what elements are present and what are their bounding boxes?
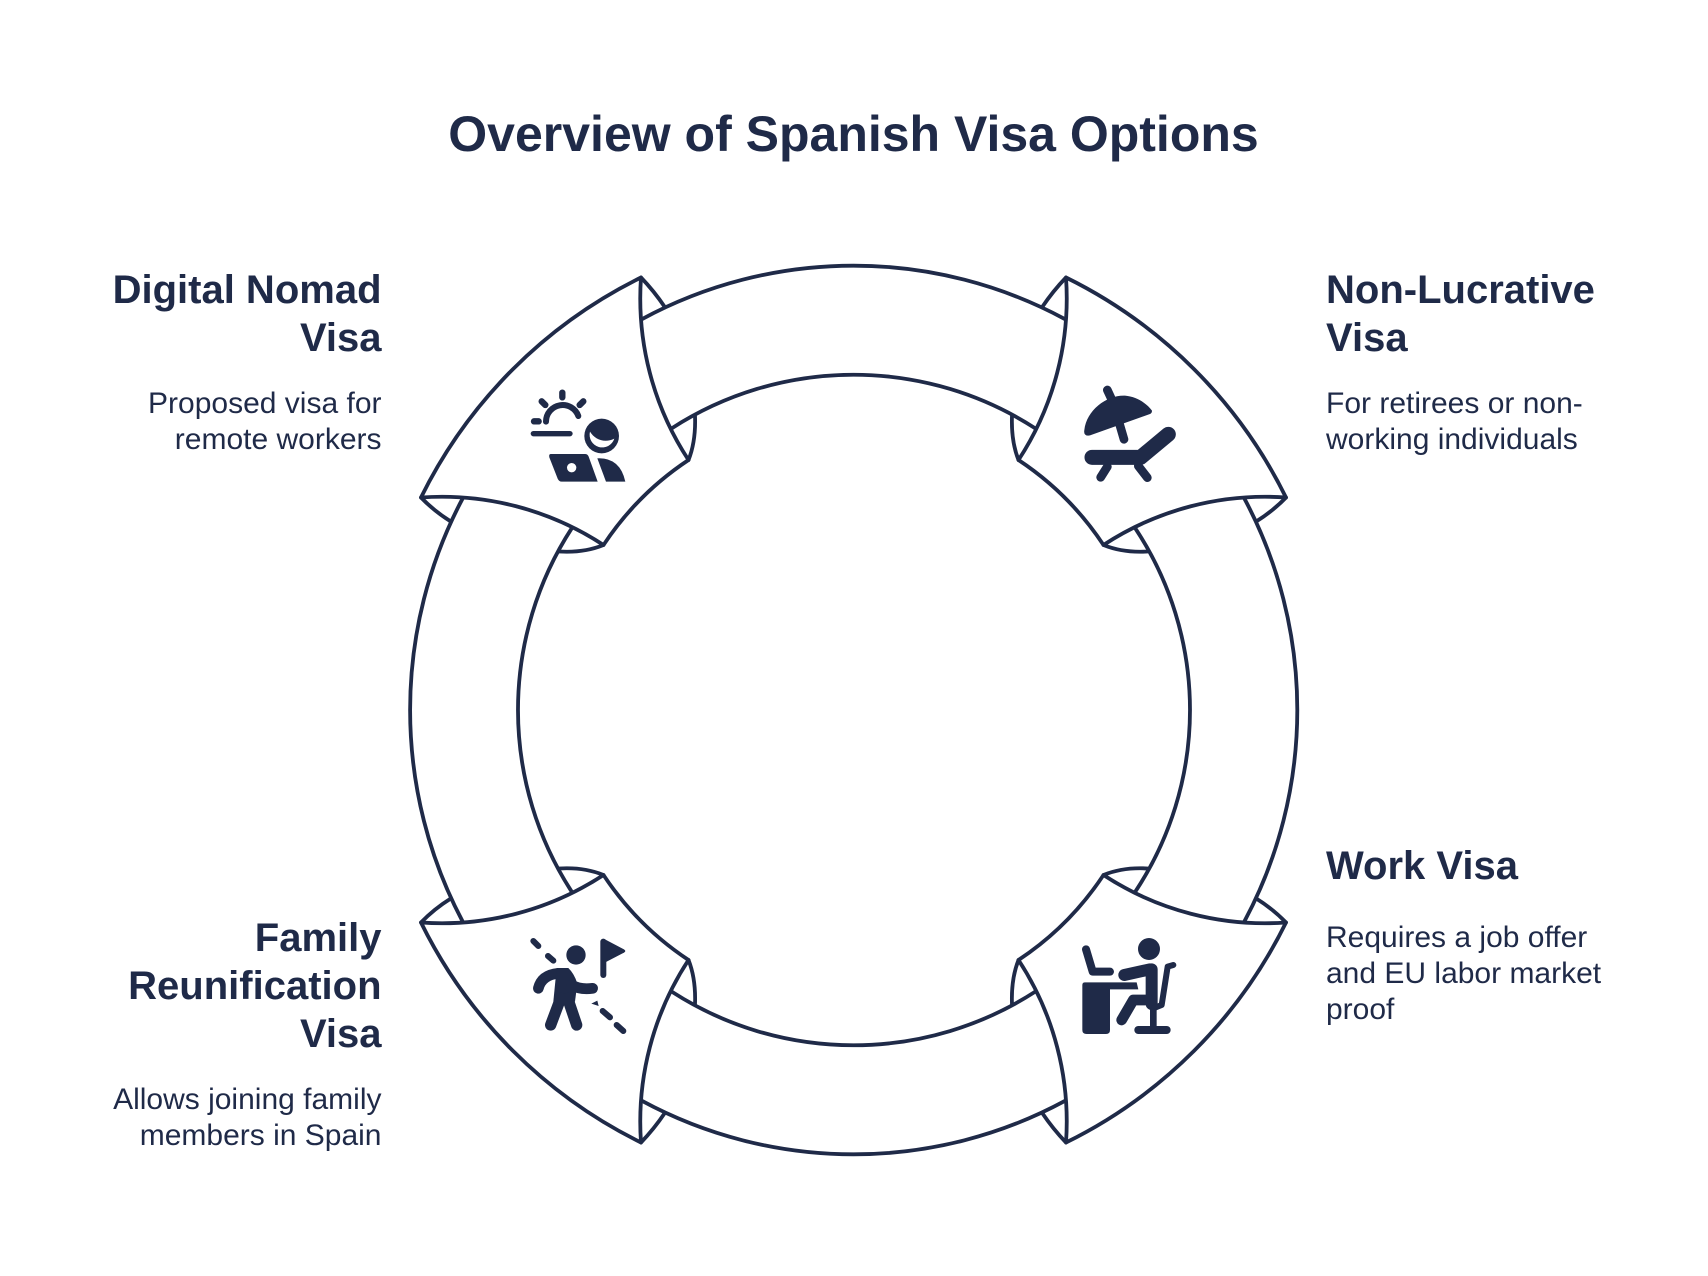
icon: digital nomad with sun and laptop (533, 393, 625, 482)
text block: Family Reunification Visa: Reunification (128, 964, 382, 1008)
icon: person working at a desk (1082, 938, 1173, 1034)
arrow segment: bottom right (1018, 875, 1286, 1142)
icon: umbrella and sun lounger (1084, 390, 1168, 478)
text block: Family Reunification Visa: Allows joining family (113, 1083, 382, 1116)
band: right connector (1135, 498, 1297, 922)
text block: Digital Nomad Visa (113, 268, 382, 456)
band: top connector (642, 266, 1065, 428)
band: bottom connector (642, 992, 1065, 1154)
band: left connector (410, 498, 572, 922)
text block: Non-Lucrative Visa (1325, 268, 1595, 456)
text block: Non-Lucrative Visa: working individuals (1325, 423, 1578, 456)
icon: hiker with flag and dashed path (533, 939, 625, 1031)
text block: Family Reunification Visa: Family (255, 916, 382, 960)
arrow segment: top left (421, 278, 688, 545)
text block: Family Reunification Visa: Visa (300, 1012, 382, 1056)
text block: Non-Lucrative Visa: Visa (1326, 316, 1408, 360)
circular cycle diagram (410, 266, 1297, 1154)
arrow segment: top right (1018, 278, 1286, 545)
text block: Digital Nomad Visa: remote workers (175, 423, 382, 456)
text block: Family Reunification Visa (113, 916, 382, 1152)
arrow segment: bottom left (421, 875, 688, 1142)
text block: Digital Nomad Visa: Visa (300, 316, 382, 360)
text block: Digital Nomad Visa: Proposed visa for (148, 387, 382, 420)
text block: Family Reunification Visa: members in Spain (140, 1119, 382, 1152)
text block: Non-Lucrative Visa: For retirees or non- (1326, 387, 1583, 420)
title: Overview of Spanish Visa Options (448, 106, 1259, 162)
text block: Work Visa (1326, 844, 1602, 1026)
folded flaps at segment corners (421, 278, 1286, 1142)
text block: Work Visa: proof (1326, 993, 1395, 1026)
text block: Work Visa: Work Visa (1326, 844, 1519, 888)
text block: Digital Nomad Visa: Digital Nomad (113, 268, 382, 312)
text block: Work Visa: and EU labor market (1326, 957, 1602, 990)
text block: Work Visa: Requires a job offer (1326, 921, 1587, 954)
text block: Non-Lucrative Visa: Non-Lucrative (1326, 268, 1595, 312)
